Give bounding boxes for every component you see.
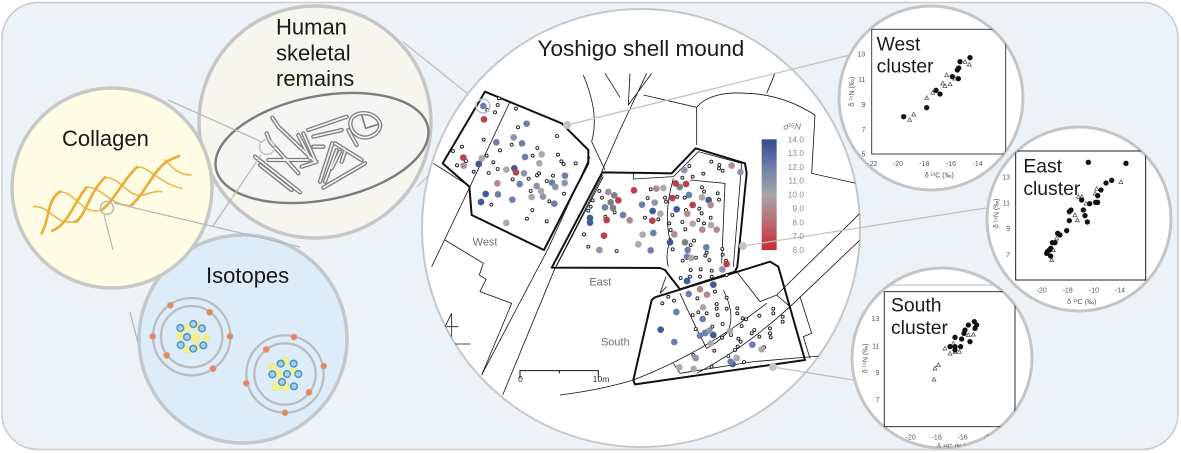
panel: east cluster plot: δ ¹⁵N (‰) xyxy=(994,198,1001,228)
colour legend: 7.0 xyxy=(792,231,804,241)
panel: south cluster plot: 9 xyxy=(875,370,879,377)
panel: east cluster plot: δ ¹³C (‰) xyxy=(1067,299,1096,306)
panel: west cluster plot: -20 xyxy=(893,161,903,168)
panel: Yoshigo shell mound map xyxy=(422,9,863,447)
panel: west cluster plot: 5 xyxy=(861,152,865,159)
heading: east cluster: cluster xyxy=(1023,179,1081,200)
heading: collagen: Collagen xyxy=(62,126,149,151)
roads and parcels xyxy=(432,73,863,395)
icon: collagen helix xyxy=(33,156,191,233)
heading: west cluster: cluster xyxy=(877,57,934,78)
colour legend: 8.0 xyxy=(792,217,804,227)
heading: west cluster: West xyxy=(877,35,921,56)
marker: sampled bone xyxy=(260,140,274,154)
scale bar: 10m xyxy=(593,374,610,384)
open sample points xyxy=(451,97,784,368)
heading: south cluster: South xyxy=(891,296,942,317)
area labels: South xyxy=(601,337,630,349)
heading: Yoshigo shell mound: Yoshigo shell mound xyxy=(538,36,744,61)
cluster outlines xyxy=(443,92,805,384)
panel: west cluster plot: δ ¹³C (‰) xyxy=(925,172,954,179)
small marker on map xyxy=(476,99,490,113)
site map xyxy=(432,73,863,395)
burial ellipse xyxy=(206,76,438,220)
panel: west cluster plot: -18 xyxy=(919,161,929,168)
cluster anchor points xyxy=(563,121,777,371)
panel: south cluster plot: 11 xyxy=(872,343,879,350)
connector lines between human remains and map xyxy=(403,42,483,187)
panel: south cluster plot: δ ¹³C (‰) xyxy=(937,444,966,451)
panel: south cluster plot: -18 xyxy=(932,434,942,441)
panel: west cluster plot: 7 xyxy=(861,127,865,134)
panel: east cluster plot: 11 xyxy=(1003,200,1010,207)
area labels: West xyxy=(473,237,497,249)
panel: west cluster plot: 9 xyxy=(861,102,865,109)
panel: east cluster plot: -20 xyxy=(1037,287,1047,294)
colour legend: 12.0 xyxy=(788,162,804,172)
heading: east cluster: East xyxy=(1023,157,1063,178)
panel: human skeletal remains xyxy=(199,6,438,238)
colour legend: 14.0 xyxy=(788,134,804,144)
colour legend xyxy=(762,121,804,255)
panel: isotopes xyxy=(139,235,347,443)
colour legend: d¹⁵N xyxy=(783,121,802,131)
coloured sample points xyxy=(460,103,765,372)
scale bar: 0 xyxy=(518,374,523,384)
panel: south cluster plot: 13 xyxy=(872,316,879,323)
panel: west cluster plot: 11 xyxy=(858,77,865,84)
panel: west cluster plot: -16 xyxy=(946,161,956,168)
panel: west cluster plot: δ ¹⁵N (‰) xyxy=(849,77,856,107)
colour legend: 10.0 xyxy=(788,190,804,200)
colour legend: 9.0 xyxy=(792,203,804,213)
colour legend: 13.0 xyxy=(788,148,804,158)
heading: human skeletal remains: skeletal xyxy=(276,40,351,66)
panel: east cluster plot: -14 xyxy=(1115,287,1125,294)
panel: south cluster plot: 7 xyxy=(875,397,879,404)
heading: south cluster: cluster xyxy=(891,318,948,339)
colour legend: 6.0 xyxy=(792,245,804,255)
panel: south cluster plot: -14 xyxy=(984,434,994,441)
panel: collagen xyxy=(12,88,212,288)
heading: human skeletal remains: Human xyxy=(276,14,347,40)
panel: south cluster plot: -20 xyxy=(906,434,916,441)
connector lines from map to cluster plots xyxy=(567,52,986,380)
panel: south cluster plot: -16 xyxy=(958,434,968,441)
icon: skeleton xyxy=(255,113,380,192)
heading: human skeletal remains: remains xyxy=(276,66,354,91)
panel: west cluster plot: -14 xyxy=(973,161,983,168)
panel: west cluster plot: 13 xyxy=(858,52,865,59)
panel: east cluster plot: 7 xyxy=(1006,252,1010,259)
panel: south cluster plot: δ ¹⁵N (‰) xyxy=(862,343,869,373)
panel: east cluster plot xyxy=(987,127,1171,311)
area labels xyxy=(473,237,630,349)
heading: isotopes: Isotopes xyxy=(206,263,289,288)
scale bar xyxy=(518,370,609,382)
panel: west cluster plot xyxy=(839,6,1023,190)
panel: east cluster plot: -18 xyxy=(1063,287,1073,294)
area labels: East xyxy=(589,276,611,288)
colour legend: 11.0 xyxy=(788,176,804,186)
connector lines between collagen, isotopes and remains xyxy=(104,100,300,343)
panel: east cluster plot: 9 xyxy=(1006,226,1010,233)
panel: south cluster plot xyxy=(852,268,1032,451)
panel: east cluster plot: 13 xyxy=(1002,174,1010,181)
panel: east cluster plot: -10 xyxy=(1089,287,1099,294)
marker: collagen detail xyxy=(100,202,114,214)
icon: atoms xyxy=(150,298,327,416)
panel: west cluster plot: -22 xyxy=(867,161,877,168)
